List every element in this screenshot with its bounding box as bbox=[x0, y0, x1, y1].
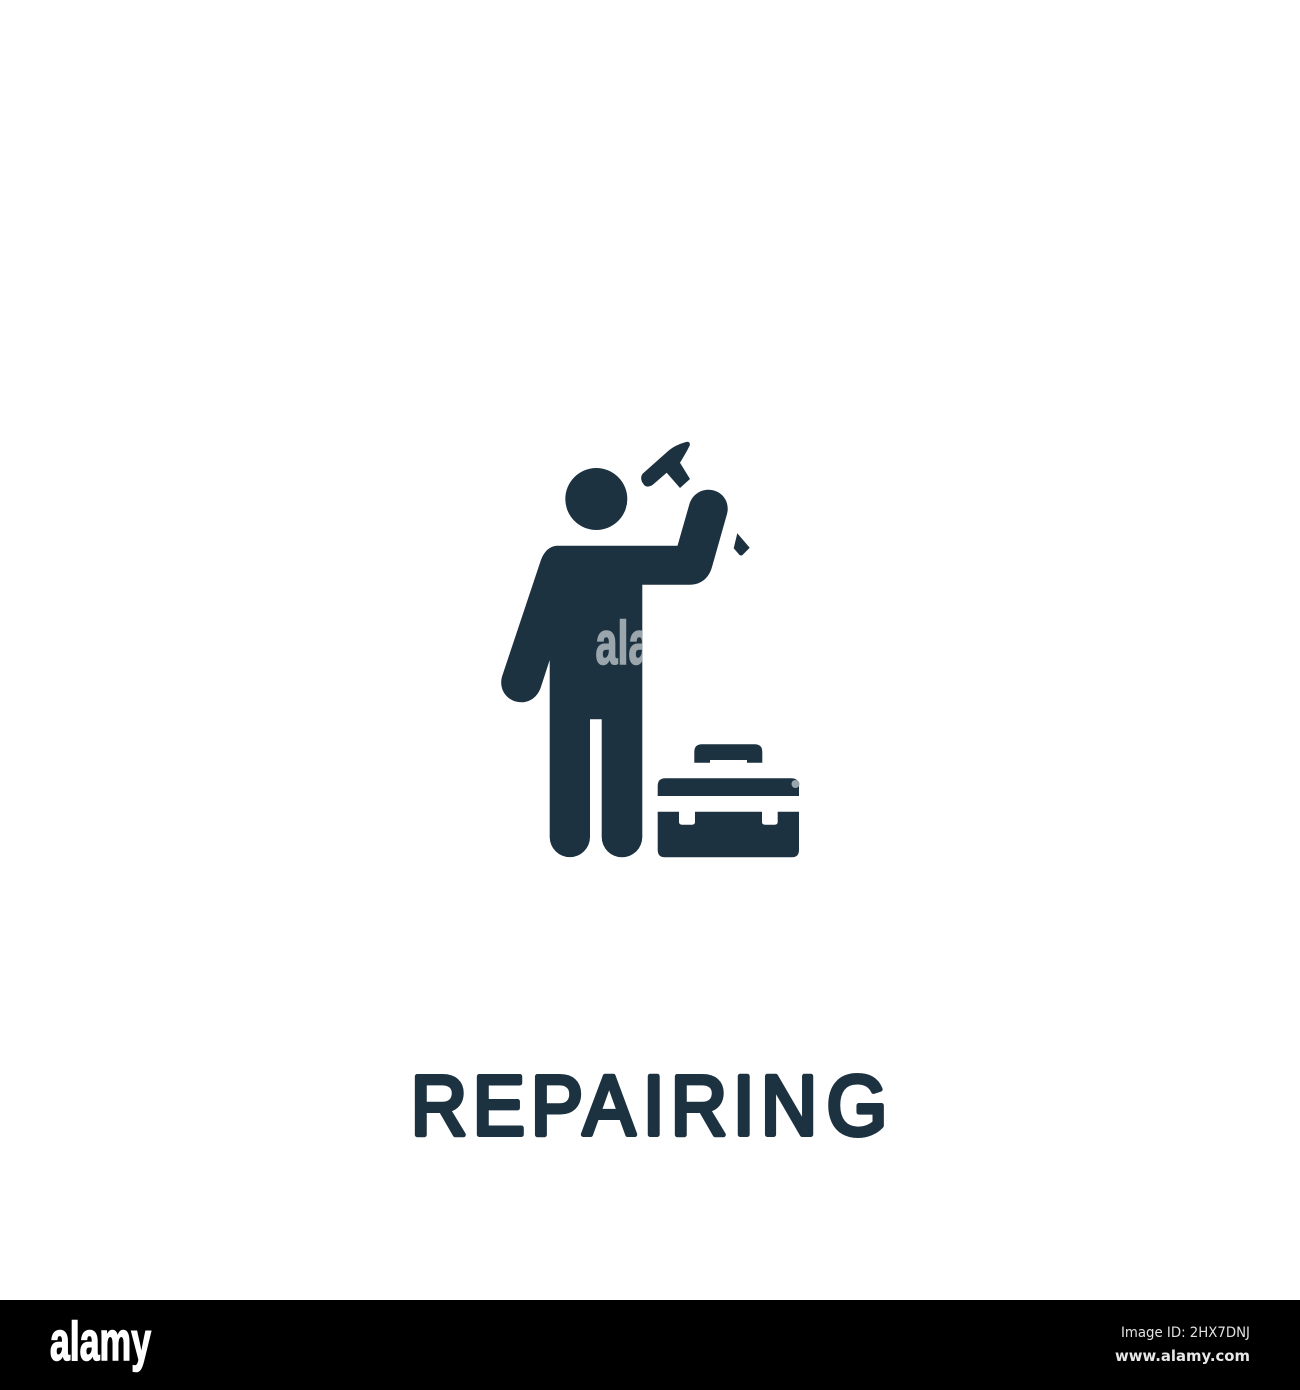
title: REPAIRING: REPAIRING bbox=[411, 1060, 887, 1153]
toolbox handle bbox=[694, 744, 762, 763]
icon: hammer head bbox=[641, 442, 690, 488]
watermark: alamy on body: alamy bbox=[596, 609, 708, 677]
toolbox lid bbox=[658, 778, 799, 796]
watermark: spot on toolbox bbox=[792, 780, 800, 788]
footer image id: Image ID: 2HX7DNJ bbox=[1121, 1325, 1250, 1341]
icon: hammer handle end bbox=[734, 533, 750, 556]
footer website: www.alamy.com bbox=[1115, 1347, 1250, 1365]
toolbox base bbox=[658, 812, 799, 857]
icon: worker head bbox=[565, 468, 627, 530]
icon: worker body with raised arm bbox=[501, 490, 728, 857]
footer bar bbox=[0, 1300, 1300, 1390]
icon: repairing worker with hammer and toolbox bbox=[501, 442, 799, 857]
icon: toolbox bbox=[658, 744, 799, 857]
footer logo: alamy: alamy bbox=[50, 1310, 151, 1372]
